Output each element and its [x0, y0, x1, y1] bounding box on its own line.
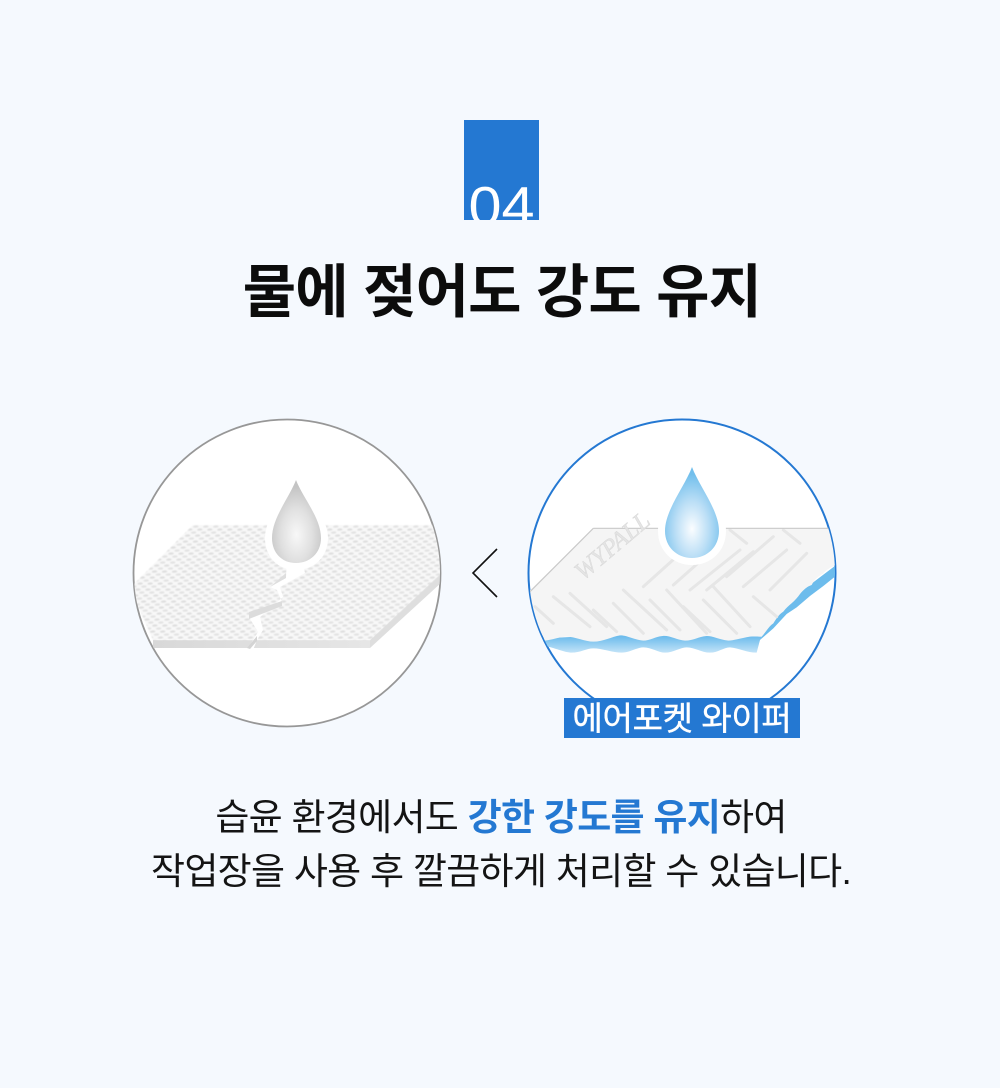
- embossed wet sheet: [523, 507, 838, 653]
- description text: 습윤 환경에서도 강한 강도를 유지하여: [215, 797, 787, 838]
- herringbone emboss: [535, 530, 807, 633]
- icon: grey water drop: [265, 470, 328, 570]
- label: air pocket wiper: 에어포켓 와이퍼: [573, 700, 791, 737]
- panel: air pocket wiper circle: [528, 418, 836, 698]
- description text: 작업장을 사용 후 깔끔하게 처리할 수 있습니다.: [151, 851, 851, 892]
- comparison illustration: [132, 418, 836, 728]
- number badge: [464, 120, 539, 220]
- embossed brand text: WYPALL: [570, 507, 656, 586]
- arrow: less-than comparison: [473, 549, 497, 597]
- torn textured sheet: [130, 525, 445, 650]
- icon: blue water drop: [658, 459, 726, 565]
- blue water band: [543, 563, 838, 653]
- sheet surface: [523, 528, 838, 642]
- title: 물에 젖어도 강도 유지: [243, 260, 761, 325]
- panel: ordinary wiper circle: [130, 420, 445, 726]
- description text: [151, 797, 851, 892]
